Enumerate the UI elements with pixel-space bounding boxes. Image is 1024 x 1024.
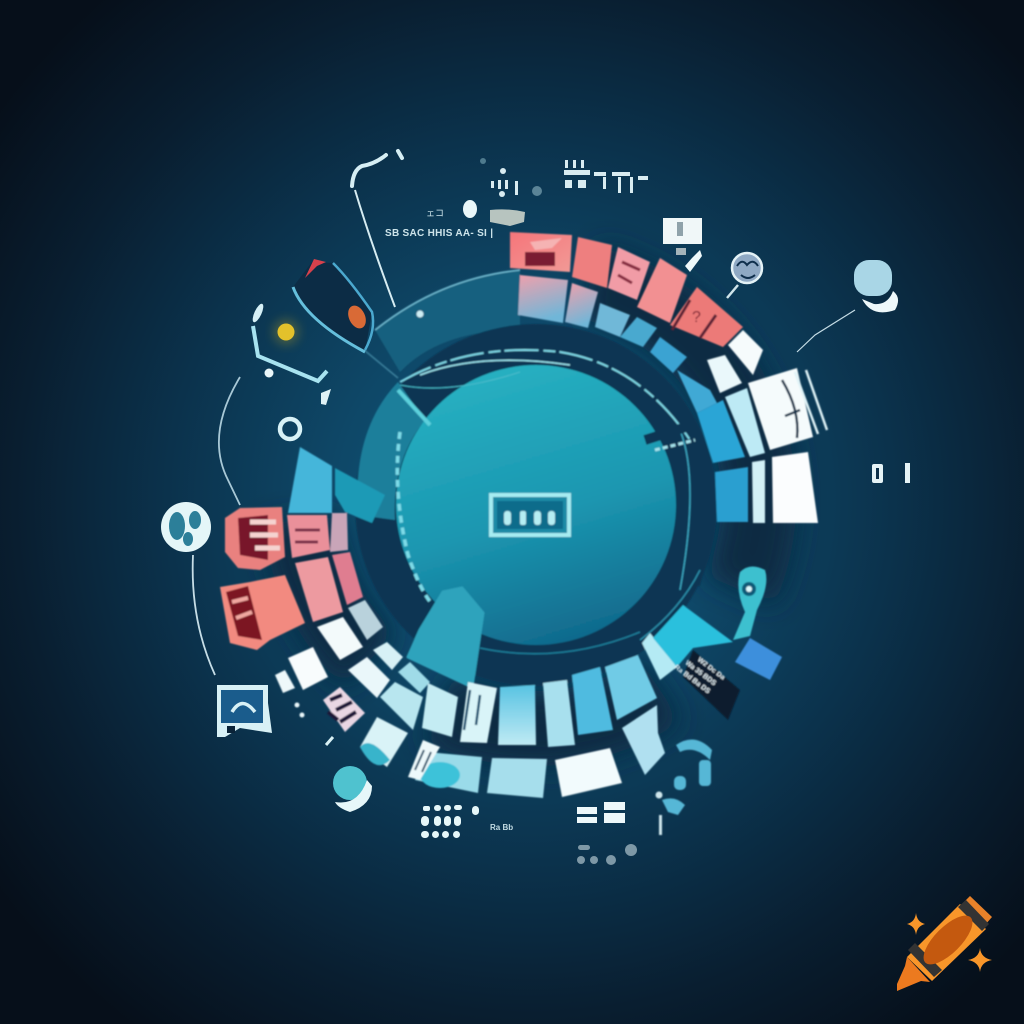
bottom-right blob cluster <box>656 740 712 835</box>
icon: right small bars <box>872 463 910 483</box>
upper-right red cells: ? <box>692 309 701 326</box>
connector line right <box>797 310 855 352</box>
upper-right red cells <box>510 232 743 347</box>
icon: heart ring <box>727 253 762 298</box>
outer teal arc band <box>358 270 520 378</box>
top text fragment: SB SAC HHIS AA- SI | <box>385 228 493 239</box>
beige top tab <box>490 209 525 226</box>
left red cells <box>220 507 383 650</box>
upper-right white cells <box>707 330 827 523</box>
cell backing shadow <box>300 282 759 729</box>
stacked bars bottom <box>577 802 625 823</box>
connector line top <box>355 190 395 307</box>
left pale-blue block <box>288 447 385 523</box>
dark text panel <box>673 648 740 720</box>
central disc <box>396 365 676 645</box>
icon: top-left hook <box>352 151 402 186</box>
dark ring <box>355 324 717 686</box>
capsule cell <box>360 717 408 767</box>
dot grid <box>421 805 479 838</box>
logo: crayon <box>897 896 992 991</box>
right-hand teal pin <box>733 566 766 640</box>
QR-like block <box>294 687 365 732</box>
icon: white box <box>663 218 702 272</box>
lighter halo crescent <box>357 382 425 520</box>
top cluster small bars <box>491 160 648 197</box>
bottom cells <box>408 605 782 798</box>
dark text panel: Ra Bd Ba DS <box>673 664 711 695</box>
icon: monitor <box>217 685 272 737</box>
circular diagram <box>220 232 827 835</box>
connector line left upper <box>219 377 240 505</box>
icon: yellow dot with bracket <box>251 302 331 405</box>
ring detail lines <box>397 350 708 654</box>
lower-left white cells <box>275 617 458 737</box>
small top mark: ェコ <box>426 208 444 218</box>
upper-right mid cells <box>518 275 765 523</box>
bottom teal shard <box>408 588 483 687</box>
dark text panel: W2 Dc Da <box>696 656 726 681</box>
grey dots bottom <box>577 844 637 865</box>
center icon <box>491 495 569 535</box>
icon: left circle badge <box>161 502 211 552</box>
icon: capsule with red and orange marks <box>293 259 373 352</box>
connector line left lower <box>193 555 215 675</box>
small label bottom: Ra Bb <box>490 823 513 832</box>
small top mark <box>426 158 486 218</box>
icon: small ring <box>280 419 300 439</box>
icon: right speech bubble <box>854 260 898 312</box>
icon: teal ball <box>326 737 372 812</box>
dark text panel: Wa 35 BDS <box>684 660 717 687</box>
